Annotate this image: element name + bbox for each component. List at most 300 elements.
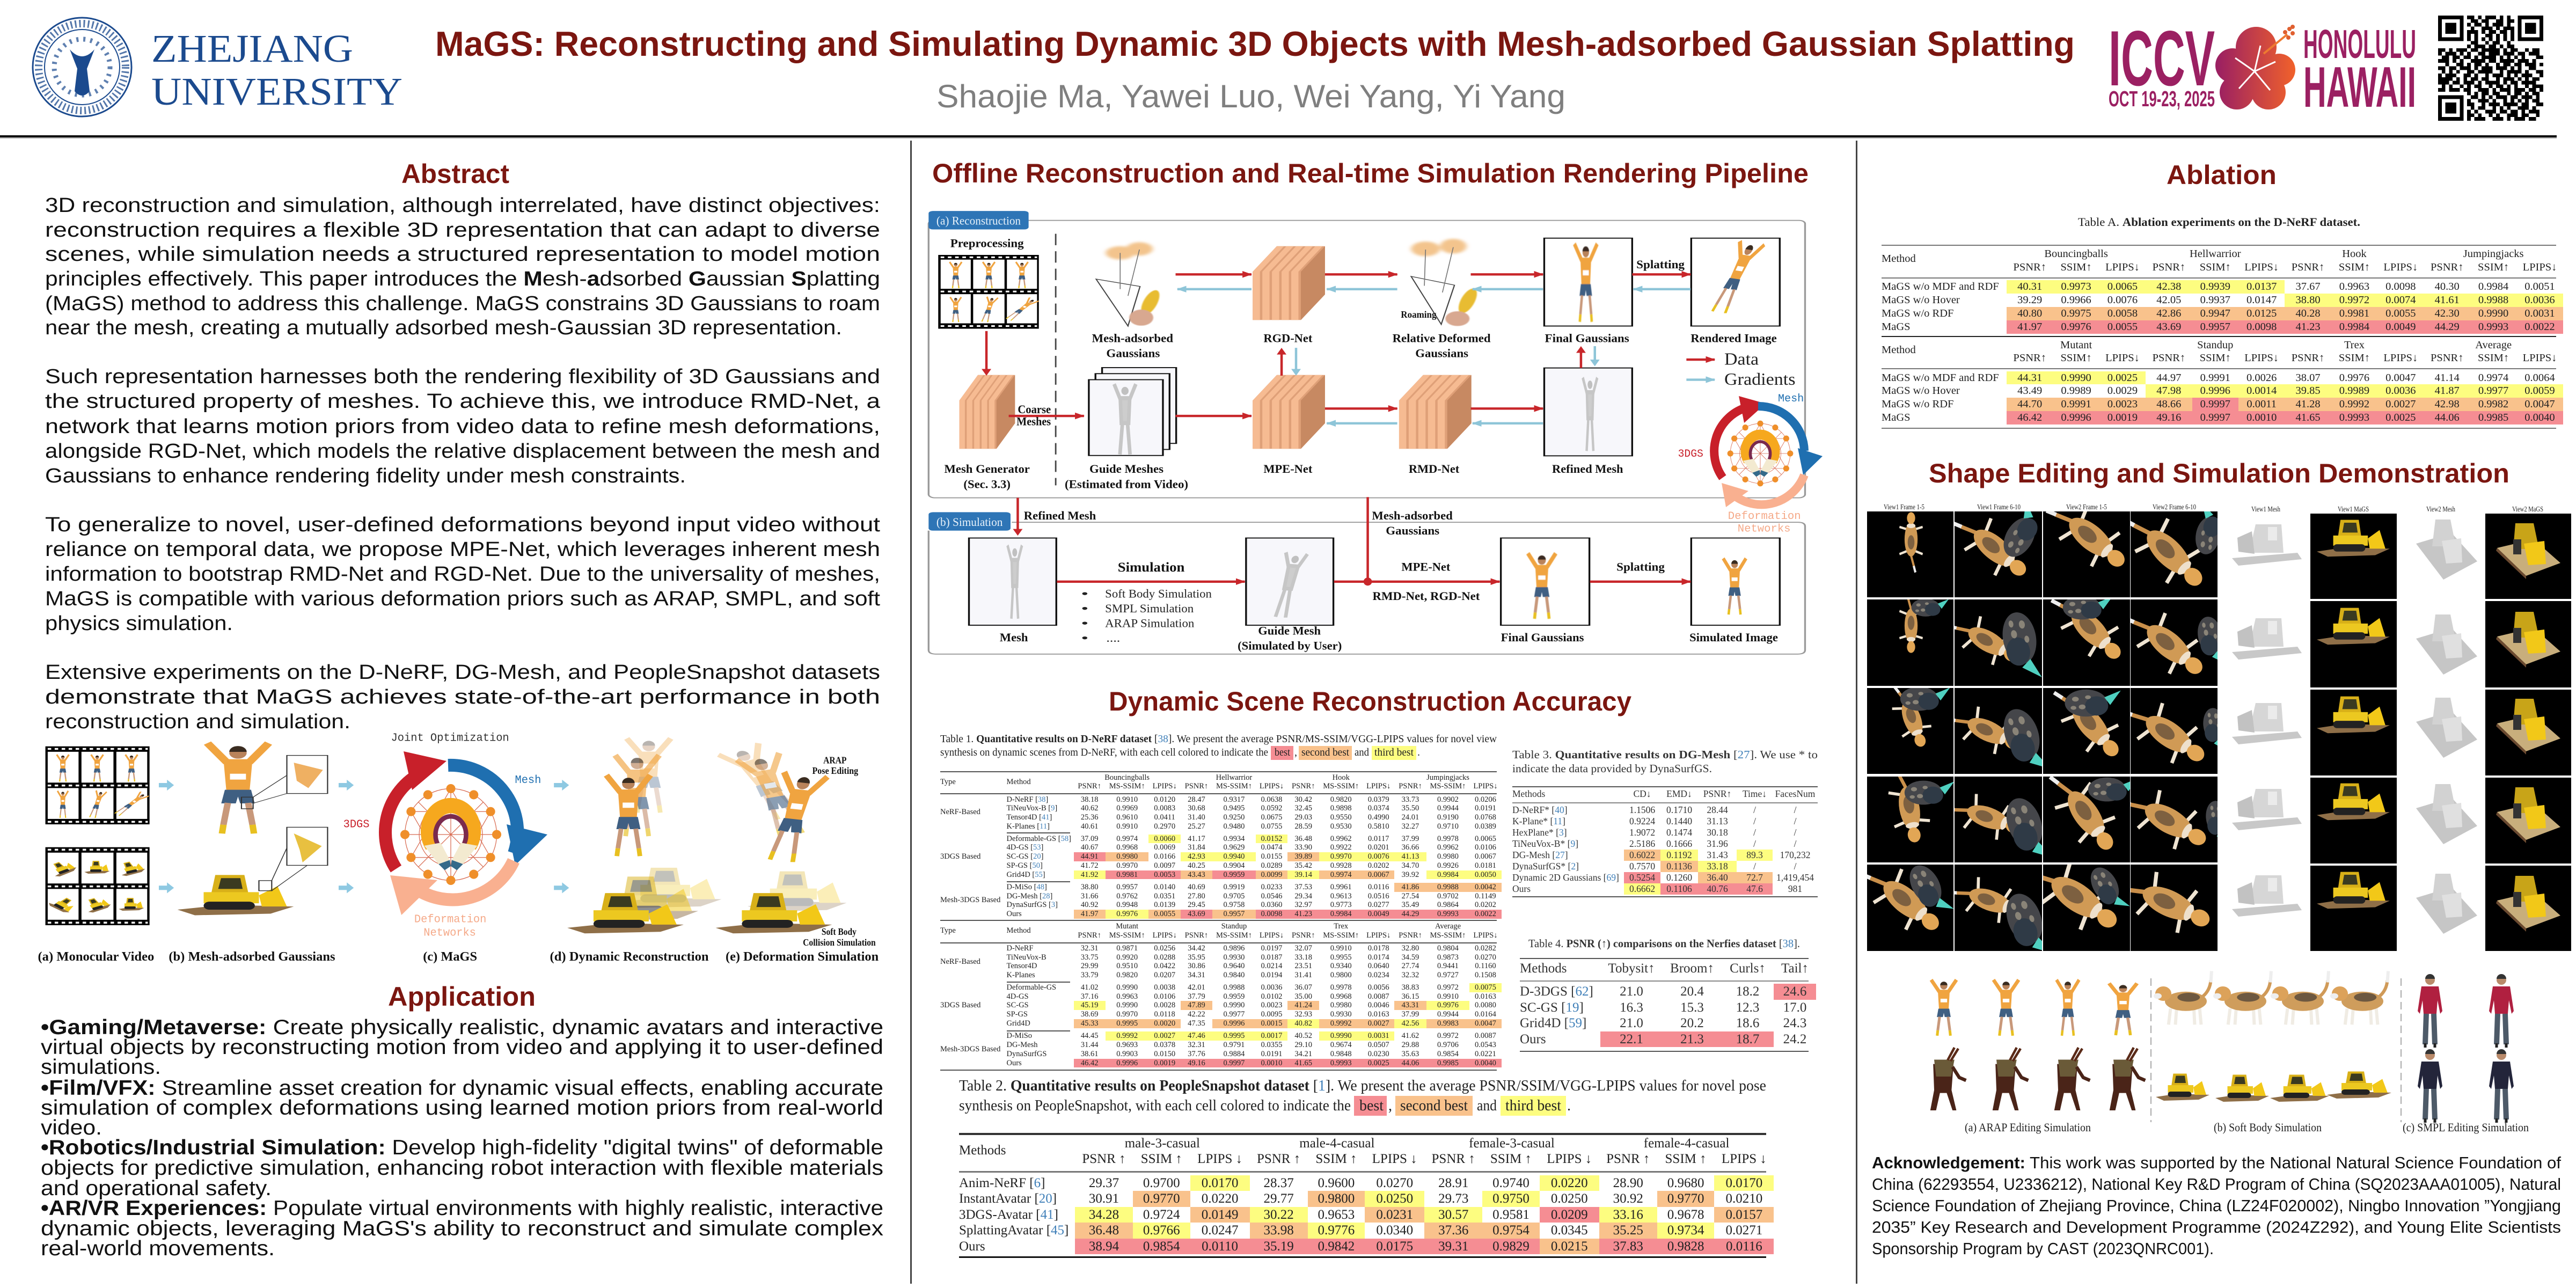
labels: Meshes <box>1016 415 1051 428</box>
text block: acknowledgement: 2035” Key Research and Development Programme (2024Z292), and Young Elite Scientists <box>1872 1218 2561 1236</box>
table 1: D-NeRF results: 40.92 <box>1081 901 1098 909</box>
table A: ablation results: 0.0011 <box>2246 398 2277 410</box>
table 1: D-NeRF results: 0.0020 <box>1154 1019 1175 1028</box>
caption: table 1: , <box>1294 747 1297 758</box>
panel: simulation: • <box>1081 602 1088 616</box>
table 1: D-NeRF results: 0.0140 <box>1154 883 1175 891</box>
table 1: D-NeRF results: 0.0360 <box>1261 901 1282 909</box>
table 2: PeopleSnapshot results: 0.9828 <box>1667 1239 1704 1254</box>
table 1: D-NeRF results: 0.9928 <box>1330 861 1352 870</box>
panel: simulation: Refined Mesh <box>1024 509 1096 523</box>
table 1: D-NeRF results: 32.80 <box>1402 944 1419 953</box>
table 1: D-NeRF results: 23.51 <box>1294 962 1312 970</box>
table 1: D-NeRF results: 31.84 <box>1188 843 1205 852</box>
table 1: D-NeRF results: 0.9993 <box>1437 910 1459 918</box>
table 3: DG-Mesh results: 0.1440 <box>1666 816 1692 826</box>
table 1: D-NeRF results: NeRF-Based <box>940 957 980 966</box>
table A: ablation results: 0.9989 <box>2061 385 2091 397</box>
table 1: D-NeRF results: 0.0202 <box>1368 861 1389 870</box>
table 2: PeopleSnapshot results: 28.90 <box>1613 1176 1643 1190</box>
table 1: D-NeRF results: 0.9990 <box>1116 1001 1138 1009</box>
table 2: PeopleSnapshot results: 0.0157 <box>1726 1208 1762 1222</box>
table A: ablation results: 0.9997 <box>2200 398 2230 410</box>
panel: simulation: Splatting <box>1616 560 1665 574</box>
table A: ablation results: LPIPS↓ <box>2244 261 2279 273</box>
table 1: D-NeRF results: 0.9984 <box>1330 910 1352 918</box>
table A: ablation results: 41.23 <box>2295 321 2321 333</box>
mini ring labels: 3DGS <box>1678 448 1703 460</box>
table 3: DG-Mesh results: 981 <box>1788 883 1802 894</box>
heading: Abstract: Abstract <box>401 159 509 189</box>
table 2: PeopleSnapshot results: 0.0215 <box>1551 1239 1588 1254</box>
text block: applications: •Robotics/Industrial Simulation: Develop high-fidelity "digital twins" of deformable <box>41 1136 883 1159</box>
table 1: D-NeRF results: Trex <box>1334 922 1348 931</box>
table 1: D-NeRF results: Jumpingjacks <box>1426 773 1469 782</box>
table 1: D-NeRF results: 0.9934 <box>1223 835 1245 843</box>
table 2: PeopleSnapshot results: PSNR ↑ <box>1082 1152 1126 1166</box>
gaussian icons <box>1096 239 1481 326</box>
table 1: D-NeRF results: 30.86 <box>1188 962 1205 970</box>
table 2: PeopleSnapshot results: 0.0231 <box>1376 1208 1413 1222</box>
table 1: D-NeRF results: 0.1149 <box>1475 892 1496 901</box>
table 1: D-NeRF results: 0.9903 <box>1116 1050 1138 1058</box>
authors: Shaojie Ma, Yawei Luo, Wei Yang, Yi Yang <box>936 78 1565 114</box>
table 1: D-NeRF results: Mesh-3DGS Based <box>940 896 1000 904</box>
caption: table 2: second best <box>1400 1097 1468 1114</box>
table A: ablation results: 40.80 <box>2017 308 2042 319</box>
table 1: D-NeRF results: LPIPS↓ <box>1260 931 1284 940</box>
caption: table 3: Table 3. Quantitative results on DG-Mesh [27]. We use * to <box>1512 748 1818 761</box>
text block: abstract: network that learns motion priors from video data to refine mesh deformations, <box>45 415 880 438</box>
table 1: D-NeRF results: 0.0411 <box>1154 813 1175 822</box>
table 1: D-NeRF results: 0.0080 <box>1475 1001 1496 1009</box>
deformation simulation illustration: ARAP <box>823 756 846 766</box>
table 1: D-NeRF results: 0.9972 <box>1437 983 1459 992</box>
table 1: D-NeRF results: 0.9974 <box>1330 870 1352 879</box>
table 2: PeopleSnapshot results: 30.91 <box>1089 1191 1119 1206</box>
table 1: D-NeRF results: Deformable-GS <box>1007 983 1056 992</box>
table 1: D-NeRF results: 31.40 <box>1188 813 1205 822</box>
table 1: D-NeRF results: 0.0163 <box>1368 1010 1389 1019</box>
table 2: PeopleSnapshot results: 28.91 <box>1438 1176 1468 1190</box>
table A: ablation results: 0.0036 <box>2385 385 2416 397</box>
column labels: View2 Mesh <box>2426 506 2455 514</box>
table 1: D-NeRF results: TiNeuVox-B [9] <box>1007 804 1057 813</box>
table 3: DG-Mesh results: 31.43 <box>1707 850 1728 860</box>
table A: ablation results: 0.0059 <box>2524 385 2555 397</box>
table 1: D-NeRF results: 41.72 <box>1081 861 1098 870</box>
table 1: D-NeRF results: 40.82 <box>1294 1019 1312 1028</box>
panel: left column abstract and application <box>41 159 884 1260</box>
film strip: monocular human video <box>46 747 150 824</box>
table 1: D-NeRF results: 38.80 <box>1081 883 1098 891</box>
table A: ablation results: 0.0125 <box>2246 308 2277 319</box>
table 1: D-NeRF results: 38.61 <box>1081 1050 1098 1058</box>
table 1: D-NeRF results: 0.0187 <box>1261 953 1282 962</box>
table 2: PeopleSnapshot results: Anim-NeRF [6] <box>959 1176 1045 1190</box>
table A: ablation results: 49.16 <box>2156 412 2181 423</box>
heading: pipeline: Offline Reconstruction and Real-time Simulation Rendering Pipeline <box>932 158 1809 188</box>
text block: applications: •Gaming/Metaverse: Create physically realistic, dynamic avatars and interactive <box>41 1016 883 1039</box>
panel: simulation: ARAP Simulation <box>1105 617 1194 630</box>
table 2: PeopleSnapshot results: LPIPS ↓ <box>1722 1152 1767 1166</box>
column labels: View1 Frame 6-10 <box>1977 503 2021 511</box>
table 1: D-NeRF results: 0.9910 <box>1437 992 1459 1001</box>
table 1: D-NeRF results: 29.03 <box>1294 813 1312 822</box>
text block: abstract: reconstruction requires a flexible 3D representation that can adapt to diverse <box>45 219 880 241</box>
table A: ablation results: 44.06 <box>2435 412 2460 423</box>
table A: ablation results: 0.0055 <box>2107 321 2138 333</box>
table 2: PeopleSnapshot results: Ours <box>959 1239 985 1254</box>
table 3: DG-Mesh results: 47.6 <box>1746 883 1763 894</box>
table 1: D-NeRF results: TiNeuVox-B <box>1007 953 1046 962</box>
column labels: View1 MaGS <box>2338 506 2369 514</box>
figure labels: 3DGS <box>343 817 369 831</box>
labels: RMD-Net <box>1409 463 1459 476</box>
film strip: monocular bulldozer video <box>46 847 150 925</box>
table 1: D-NeRF results <box>940 771 1502 1071</box>
labels: Final Gaussians <box>1545 332 1629 345</box>
table 1: D-NeRF results: 0.9340 <box>1330 962 1352 970</box>
labels: Relative Deformed <box>1393 332 1491 345</box>
title: MaGS: Reconstructing and Simulating Dynamic 3D Objects with Mesh-adsorbed Gaussian Splatting <box>435 24 2075 63</box>
table 2: PeopleSnapshot results: SSIM ↑ <box>1315 1152 1357 1166</box>
table 2: PeopleSnapshot results: 30.22 <box>1263 1208 1294 1222</box>
caption: table 1 <box>940 733 1497 760</box>
table 4: Nerfies results: Grid4D [59] <box>1520 1016 1586 1030</box>
table 1: D-NeRF results: 0.9702 <box>1437 892 1459 901</box>
table 1: D-NeRF results: 0.9530 <box>1330 822 1352 831</box>
table A: ablation results: 0.9974 <box>2478 372 2508 384</box>
table 1: D-NeRF results: 0.9992 <box>1116 1031 1138 1040</box>
mini ring labels <box>1678 393 1804 535</box>
table 1: D-NeRF results: MS-SSIM↑ <box>1430 781 1466 790</box>
table 4: Nerfies results: D-3DGS [62] <box>1520 984 1593 999</box>
table 1: D-NeRF results: 29.34 <box>1294 892 1312 901</box>
table 1: D-NeRF results: 0.0755 <box>1261 822 1282 831</box>
icon: MaGS joint-optimization ring <box>385 751 547 915</box>
table 1: D-NeRF results: Average <box>1435 922 1461 931</box>
table 1: D-NeRF results: 0.0087 <box>1475 1031 1496 1040</box>
table 3: DG-Mesh results: 30.18 <box>1707 827 1728 838</box>
table 2: PeopleSnapshot results: 0.9766 <box>1143 1223 1180 1238</box>
panel: simulation: .... <box>1106 632 1120 645</box>
table 1: D-NeRF results: 37.99 <box>1402 1010 1419 1019</box>
table A: ablation results: 41.97 <box>2017 321 2042 333</box>
dynamic reconstruction illustration <box>567 738 721 933</box>
table 1: D-NeRF results: 0.9995 <box>1223 1031 1245 1040</box>
table A: ablation results: 0.9993 <box>2478 321 2508 333</box>
table 2: PeopleSnapshot results: 39.31 <box>1438 1239 1468 1254</box>
table 1: D-NeRF results: 0.0050 <box>1475 870 1496 879</box>
table 1: D-NeRF results: 41.24 <box>1294 1001 1312 1009</box>
table A: ablation results: 43.69 <box>2156 321 2181 333</box>
table 3: DG-Mesh results: HexPlane* [3] <box>1512 827 1567 838</box>
text block: abstract: Extensive experiments on the D-NeRF, DG-Mesh, and PeopleSnapshot datasets <box>45 661 880 684</box>
table 1: D-NeRF results: 36.07 <box>1294 983 1312 992</box>
panel: simulation: SMPL Simulation <box>1105 602 1194 616</box>
table A: ablation results: 43.49 <box>2017 385 2042 397</box>
table 1: D-NeRF results: 0.0282 <box>1475 944 1496 953</box>
table 1: D-NeRF results: 32.97 <box>1294 901 1312 909</box>
table 1: D-NeRF results: 0.0067 <box>1368 870 1389 879</box>
table 1: D-NeRF results: 0.9884 <box>1223 1050 1245 1058</box>
table A: ablation results: SSIM↑ <box>2478 352 2509 364</box>
table A: ablation results: 41.65 <box>2295 412 2321 423</box>
table 1: D-NeRF results: 0.0053 <box>1154 870 1175 879</box>
column labels: View2 Frame 1-5 <box>2066 503 2107 511</box>
table 1: D-NeRF results: 0.0102 <box>1261 992 1282 1001</box>
text block: abstract: alongside RGD-Net, which models the relative displacement between the mesh and <box>45 440 880 463</box>
table 1: D-NeRF results: 0.9944 <box>1437 1010 1459 1019</box>
table 1: D-NeRF results: 0.0010 <box>1261 1059 1282 1067</box>
table 1: D-NeRF results: 0.0067 <box>1475 852 1496 861</box>
table 1: D-NeRF results: 0.0056 <box>1368 983 1389 992</box>
table 1: D-NeRF results: DG-Mesh [28] <box>1007 892 1052 901</box>
table 4: Nerfies results: 24.3 <box>1783 1016 1806 1030</box>
table A: ablation results: 42.38 <box>2156 281 2181 292</box>
table 1: D-NeRF results: 0.0174 <box>1368 953 1389 962</box>
table 1: D-NeRF results: 0.0374 <box>1368 804 1389 813</box>
table 3: DG-Mesh results: / <box>1794 804 1796 815</box>
table 1: D-NeRF results: 0.0099 <box>1261 870 1282 879</box>
caption: table 1: second best <box>1301 747 1349 758</box>
table A: ablation results: LPIPS↓ <box>2523 261 2557 273</box>
table 2: PeopleSnapshot results: 0.9678 <box>1667 1208 1704 1222</box>
logo: ICCV 2025 Honolulu Hawaii <box>2109 14 2416 119</box>
network blocks <box>960 246 1472 449</box>
table A: ablation results: 0.9989 <box>2339 385 2369 397</box>
labels: Data <box>1724 350 1759 368</box>
table 4: Nerfies results: 24.2 <box>1783 1031 1806 1046</box>
table A: ablation results: 0.9976 <box>2339 372 2369 384</box>
table 1: D-NeRF results: 0.0065 <box>1475 835 1496 843</box>
table 1: D-NeRF results: 0.9706 <box>1437 1041 1459 1049</box>
logo: ICCV 2025 Honolulu Hawaii: HAWAII <box>2303 55 2416 119</box>
table 1: D-NeRF results: Standup <box>1221 922 1247 931</box>
table 1: D-NeRF results: MS-SSIM↑ <box>1216 781 1252 790</box>
labels: Guide Meshes <box>1089 463 1163 476</box>
table 2: PeopleSnapshot results: SSIM ↑ <box>1490 1152 1532 1166</box>
table 1: D-NeRF results: SC-GS [20] <box>1007 852 1043 861</box>
table A: ablation results: 0.9988 <box>2478 294 2508 306</box>
table 2: PeopleSnapshot results: 0.9750 <box>1492 1191 1529 1206</box>
table 1: D-NeRF results: 33.75 <box>1081 953 1098 962</box>
table 1: D-NeRF results: 0.0233 <box>1261 883 1282 891</box>
labels: Mesh-adsorbed <box>1092 332 1173 345</box>
table 1: D-NeRF results: 0.0036 <box>1261 983 1282 992</box>
table 4: Nerfies results: Methods <box>1520 961 1567 976</box>
table 3: DG-Mesh results: 0.1474 <box>1666 827 1692 838</box>
table 1: D-NeRF results: 0.9990 <box>1116 983 1138 992</box>
table 1: D-NeRF results: 0.0019 <box>1154 1059 1175 1067</box>
table 1: D-NeRF results: SP-GS <box>1007 1010 1028 1019</box>
table 2: PeopleSnapshot results: 34.28 <box>1089 1208 1119 1222</box>
table 2: PeopleSnapshot results: 0.9653 <box>1318 1208 1355 1222</box>
table 3: DG-Mesh results: 0.1136 <box>1666 861 1692 872</box>
table A: ablation results: MaGS <box>1882 412 1911 423</box>
table 1: D-NeRF results: NeRF-Based <box>940 808 980 816</box>
table 1: D-NeRF results: 0.0155 <box>1261 852 1282 861</box>
table 1: D-NeRF results: 0.9854 <box>1437 1050 1459 1058</box>
table A: ablation results: Method <box>1882 344 1916 356</box>
table A: ablation results: 0.9991 <box>2200 372 2230 384</box>
table 1: D-NeRF results: 0.9820 <box>1330 795 1352 804</box>
table A: ablation results: 40.31 <box>2017 281 2042 292</box>
table A: ablation results: SSIM↑ <box>2061 352 2092 364</box>
table A: ablation results: 0.0029 <box>2107 385 2138 397</box>
panel: simulation: Mesh <box>1000 631 1028 645</box>
table 1: D-NeRF results: 40.25 <box>1188 861 1205 870</box>
table 1: D-NeRF results: 0.1160 <box>1475 962 1496 970</box>
text block: abstract: physics simulation. <box>45 612 233 635</box>
table 1: D-NeRF results: DG-Mesh <box>1007 1041 1038 1049</box>
panel: simulation: Gaussians <box>1386 524 1439 538</box>
table 1: D-NeRF results: 32.32 <box>1402 971 1419 979</box>
table 1: D-NeRF results: 0.9993 <box>1330 1059 1352 1067</box>
table 1: D-NeRF results: 0.9705 <box>1223 892 1245 901</box>
table 1: D-NeRF results: Grid4D [55] <box>1007 870 1045 879</box>
table A: ablation results: 0.0022 <box>2524 321 2555 333</box>
table 1: D-NeRF results: 0.0038 <box>1154 983 1175 992</box>
table 1: D-NeRF results: PSNR↑ <box>1292 931 1315 940</box>
table 1: D-NeRF results: LPIPS↓ <box>1473 781 1498 790</box>
arrows between stages <box>159 780 569 893</box>
table 1: D-NeRF results: 40.67 <box>1081 843 1098 852</box>
table A: ablation results: 39.29 <box>2017 294 2042 306</box>
table A: ablation results: 0.0074 <box>2385 294 2416 306</box>
table 1: D-NeRF results: 27.74 <box>1402 962 1419 970</box>
column labels: View1 Mesh <box>2251 506 2280 514</box>
column labels <box>1884 503 2543 514</box>
table 1: D-NeRF results: 0.9910 <box>1116 822 1138 831</box>
table 4: Nerfies results: 20.4 <box>1680 984 1704 999</box>
table A: ablation results: MaGS <box>1882 321 1911 333</box>
table 2: PeopleSnapshot results: female-3-casual <box>1469 1136 1555 1151</box>
table 3: DG-Mesh results: D-NeRF* [40] <box>1512 804 1568 815</box>
table 2: PeopleSnapshot results: 0.9724 <box>1143 1208 1180 1222</box>
table 1: D-NeRF results: 0.9710 <box>1437 822 1459 831</box>
table 1: D-NeRF results: 42.01 <box>1188 983 1205 992</box>
table A: ablation results: 0.0076 <box>2107 294 2138 306</box>
table A: ablation results: 42.05 <box>2156 294 2181 306</box>
table 4: Nerfies results: Broom↑ <box>1670 961 1714 976</box>
table 3: DG-Mesh results: 0.7570 <box>1629 861 1655 872</box>
table 1: D-NeRF results: MS-SSIM↑ <box>1109 931 1145 940</box>
table 2: PeopleSnapshot results: 0.9680 <box>1667 1176 1704 1190</box>
table A: ablation results: 0.9977 <box>2478 385 2508 397</box>
table 2: PeopleSnapshot results: 0.0170 <box>1202 1176 1238 1190</box>
table 2: PeopleSnapshot results: 0.0220 <box>1551 1176 1588 1190</box>
table 1: D-NeRF results: 27.54 <box>1402 892 1419 901</box>
table 1: D-NeRF results: 0.9955 <box>1330 953 1352 962</box>
table 2: PeopleSnapshot results: 0.9770 <box>1667 1191 1704 1206</box>
table 2: PeopleSnapshot results: InstantAvatar [20] <box>959 1191 1057 1206</box>
table 1: D-NeRF results: 0.0069 <box>1154 843 1175 852</box>
table 1: D-NeRF results: 0.9988 <box>1437 883 1459 891</box>
table 1: D-NeRF results: 0.9972 <box>1437 1031 1459 1040</box>
labels: Roaming <box>1401 309 1437 320</box>
table 1: D-NeRF results: 0.4990 <box>1368 813 1389 822</box>
figures in boxes <box>1007 241 1765 619</box>
table 3: DG-Mesh results: 1.1506 <box>1629 804 1655 815</box>
table 3: DG-Mesh results: 170,232 <box>1780 850 1810 860</box>
table 1: D-NeRF results: SP-GS [50] <box>1007 861 1043 870</box>
table 1: D-NeRF results: 41.86 <box>1402 883 1419 891</box>
table 1: D-NeRF results: 0.0270 <box>1475 953 1496 962</box>
table 1: D-NeRF results: 0.0152 <box>1261 835 1282 843</box>
table 1: D-NeRF results: Hook <box>1333 773 1350 782</box>
table 1: D-NeRF results: 0.0207 <box>1154 971 1175 979</box>
table 1: D-NeRF results: 0.9510 <box>1116 962 1138 970</box>
text block: applications: objects for predictive simulation, enhancing robot interaction with flexible materials <box>41 1157 883 1180</box>
table 1: D-NeRF results: 0.9898 <box>1330 804 1352 813</box>
table 2: PeopleSnapshot results: PSNR ↑ <box>1257 1152 1300 1166</box>
table A: ablation results: 40.30 <box>2435 281 2460 292</box>
table 2: PeopleSnapshot results: SplattingAvatar [45] <box>959 1223 1069 1238</box>
table 1: D-NeRF results: MS-SSIM↑ <box>1216 931 1252 940</box>
table 1: D-NeRF results: 43.69 <box>1188 910 1205 918</box>
table 1: D-NeRF results: 0.0106 <box>1154 992 1175 1001</box>
table 1: D-NeRF results: 0.9926 <box>1437 861 1459 870</box>
table A: ablation results: 0.0047 <box>2524 398 2555 410</box>
labels: Coarse <box>1018 403 1051 416</box>
table 4: Nerfies results: 16.3 <box>1620 1000 1643 1014</box>
table 2: PeopleSnapshot results: 38.94 <box>1089 1239 1119 1254</box>
table 2: PeopleSnapshot results: 0.0345 <box>1551 1223 1588 1238</box>
table A: ablation results <box>1882 245 2563 429</box>
table 1: D-NeRF results: 0.0640 <box>1368 962 1389 970</box>
table 3: DG-Mesh results: DynaSurfGS* [2] <box>1512 861 1579 872</box>
table 4: Nerfies results: 18.6 <box>1736 1016 1759 1030</box>
table 3: DG-Mesh results: Dynamic 2D Gaussians [69] <box>1512 872 1619 883</box>
table 1: D-NeRF results: 0.0028 <box>1154 1001 1175 1009</box>
figure labels: (a) Monocular Video <box>38 949 154 964</box>
table 3: DG-Mesh results: 0.6022 <box>1629 850 1655 860</box>
table 1: D-NeRF results: 35.95 <box>1188 953 1205 962</box>
table 1: D-NeRF results: 0.9978 <box>1330 983 1352 992</box>
table A: ablation results: 41.28 <box>2295 398 2321 410</box>
text block: abstract <box>45 194 881 733</box>
text block: acknowledgement <box>1872 1153 2561 1258</box>
table 1: D-NeRF results: 0.9976 <box>1116 910 1138 918</box>
table 1: D-NeRF results: 29.10 <box>1294 1041 1312 1049</box>
table 1: D-NeRF results: 3DGS Based <box>940 1001 980 1009</box>
table A: ablation results: 0.0064 <box>2524 372 2555 384</box>
table 1: D-NeRF results: 0.9990 <box>1330 1031 1352 1040</box>
caption: table 4: Table 4. PSNR (↑) comparisons on the Nerfies dataset [38]. <box>1528 937 1800 950</box>
table 2: PeopleSnapshot results: 0.0209 <box>1551 1208 1588 1222</box>
table 1: D-NeRF results: 0.9495 <box>1223 804 1245 813</box>
table 1: D-NeRF results: 0.0047 <box>1475 1019 1496 1028</box>
table 1: D-NeRF results: 0.0191 <box>1261 1050 1282 1058</box>
table 1: D-NeRF results: 0.9902 <box>1437 795 1459 804</box>
table A: ablation results: PSNR↑ <box>2431 261 2463 273</box>
table A: ablation results: 0.0025 <box>2385 412 2416 423</box>
table 1: D-NeRF results: 33.79 <box>1081 971 1098 979</box>
table 1: D-NeRF results: 0.9983 <box>1437 1019 1459 1028</box>
table 1: D-NeRF results: 0.0379 <box>1368 795 1389 804</box>
panel: simulation: • <box>1081 617 1088 630</box>
labels: Splatting <box>1636 258 1685 272</box>
heading: Ablation: Ablation <box>2167 160 2277 190</box>
caption: table 1: third best <box>1374 747 1414 758</box>
table 2: PeopleSnapshot results: 0.9842 <box>1318 1239 1355 1254</box>
panel: simulation: (b) Simulation <box>936 516 1002 529</box>
table 1: D-NeRF results: 0.9550 <box>1330 813 1352 822</box>
panel: reconstruction <box>928 211 1805 625</box>
text block: abstract: To generalize to novel, user-defined deformations beyond input video without <box>45 514 881 536</box>
